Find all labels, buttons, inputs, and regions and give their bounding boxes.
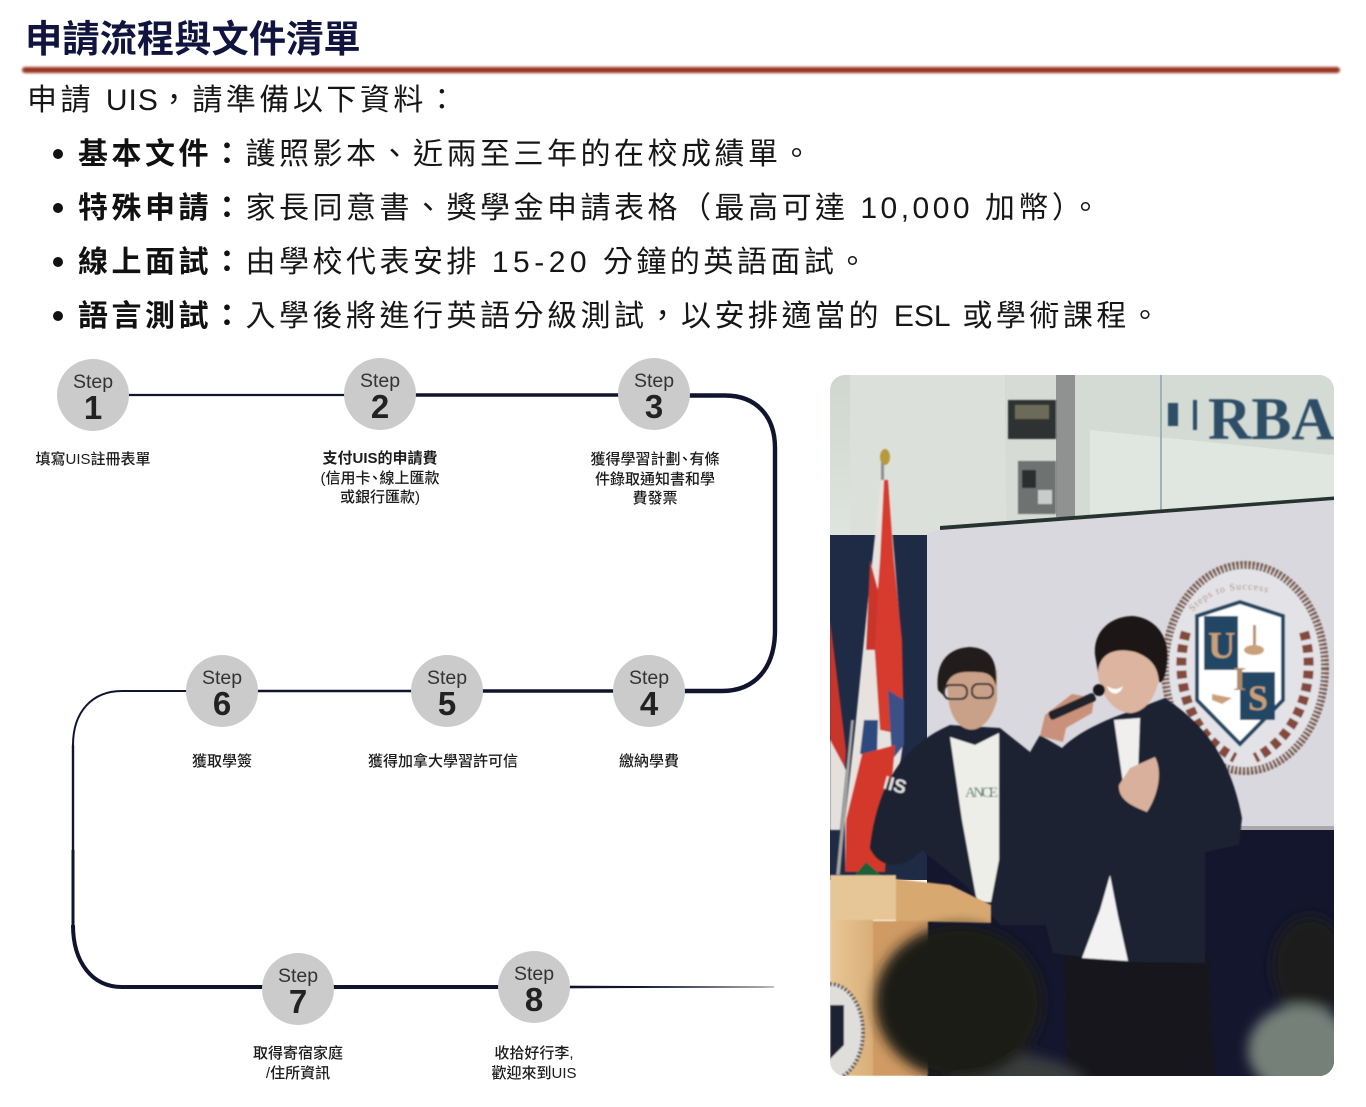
wall lettering xyxy=(1167,398,1334,440)
step 1 xyxy=(35,359,150,468)
step 1 badge xyxy=(57,359,129,431)
step 5 caption: 獲得加拿大學習許可信 xyxy=(368,753,518,770)
step 7 badge xyxy=(262,953,334,1025)
step 5 badge: 5 xyxy=(438,685,456,722)
person left: ANCE xyxy=(965,785,998,801)
item: basic documents: 基本文件：護照影本、近兩至三年的在校成績單。 xyxy=(78,138,815,171)
document list xyxy=(53,138,1163,333)
step 2 caption: 或銀行匯款) xyxy=(340,489,420,506)
step 4 badge xyxy=(613,655,685,727)
person left xyxy=(870,647,1063,925)
intro text: 申請 UIS，請準備以下資料： xyxy=(27,84,460,117)
curtain xyxy=(927,826,1334,1076)
step 2 badge: Step xyxy=(360,370,400,392)
step 6 badge xyxy=(186,655,258,727)
UIS crest: I xyxy=(1233,661,1246,698)
step 1 caption: 填寫UIS註冊表單 xyxy=(35,451,150,468)
step 2 badge xyxy=(344,358,416,430)
step 2 caption: 支付UIS的申請費 xyxy=(322,450,438,467)
step 3 badge: 3 xyxy=(645,388,663,425)
navy panel xyxy=(830,535,927,880)
person right xyxy=(1029,615,1243,1076)
item: online interview: 線上面試：由學校代表安排 15-20 分鐘的英語面試。 xyxy=(78,246,871,279)
step 8 xyxy=(491,951,576,1082)
step 2 caption xyxy=(320,450,440,506)
podium xyxy=(830,874,992,1076)
step 7 caption xyxy=(253,1045,343,1082)
wall posters xyxy=(1008,400,1056,514)
step 8 badge: Step xyxy=(514,963,554,985)
flag xyxy=(830,449,904,876)
step 4 badge: Step xyxy=(629,667,669,689)
step 3 caption: 件錄取通知書和學 xyxy=(595,470,715,488)
step 8 caption xyxy=(491,1045,576,1082)
step 6 xyxy=(186,655,258,770)
step 1 badge: 1 xyxy=(84,389,102,426)
title: 申請流程與文件清單 xyxy=(25,18,361,60)
step 3 caption: 獲得學習計劃、有條 xyxy=(590,451,720,468)
step 8 caption: 收拾好行李, xyxy=(494,1045,574,1062)
step 2 caption: (信用卡、線上匯款 xyxy=(320,470,440,486)
item: special application: 特殊申請：家長同意書、獎學金申請表格（最高可達 10,000 加幣）。 xyxy=(78,192,1104,225)
audience heads xyxy=(865,915,1334,1076)
person left: IIS xyxy=(881,773,909,799)
banner xyxy=(927,496,1334,828)
step 3 badge xyxy=(618,358,690,430)
step 5 badge xyxy=(411,655,483,727)
step 3 caption: 費發票 xyxy=(632,490,678,507)
step 4 caption: 繳納學費 xyxy=(619,753,679,770)
step 8 caption: 歡迎來到UIS xyxy=(491,1064,576,1082)
step 2 badge: 2 xyxy=(371,388,389,425)
UIS crest: S xyxy=(1248,678,1268,718)
item: language test: 語言測試：入學後將進行英語分級測試，以安排適當的 ESL 或學術課程。 xyxy=(78,300,1163,333)
UIS crest: Steps to Success xyxy=(1188,583,1268,612)
step 7 xyxy=(253,953,343,1082)
step 3 caption xyxy=(590,451,720,507)
UIS crest: U xyxy=(1208,625,1235,667)
step 8 badge xyxy=(498,951,570,1023)
step 3 badge: Step xyxy=(634,370,674,392)
step 4 badge: 4 xyxy=(640,685,658,722)
step 1 badge: Step xyxy=(73,371,113,393)
step 5 badge: Step xyxy=(427,667,467,689)
photo: student speaking on stage xyxy=(830,375,1334,1076)
step 7 badge: Step xyxy=(278,965,318,987)
step 6 caption: 獲取學簽 xyxy=(192,753,252,770)
step 6 badge: Step xyxy=(202,667,242,689)
wall lettering: RBA xyxy=(1208,386,1334,452)
step 7 caption: 取得寄宿家庭 xyxy=(253,1045,343,1062)
step 7 badge: 7 xyxy=(289,983,307,1020)
step 7 caption: /住所資訊 xyxy=(266,1064,330,1082)
step 6 badge: 6 xyxy=(213,685,231,722)
step 3 xyxy=(590,358,720,507)
title divider xyxy=(22,66,1340,72)
wall background xyxy=(830,375,1334,545)
step 8 badge: 8 xyxy=(525,981,543,1018)
step 2 xyxy=(320,358,440,506)
step 4 xyxy=(613,655,685,770)
UIS crest xyxy=(1160,560,1330,776)
step 5 xyxy=(368,655,518,770)
